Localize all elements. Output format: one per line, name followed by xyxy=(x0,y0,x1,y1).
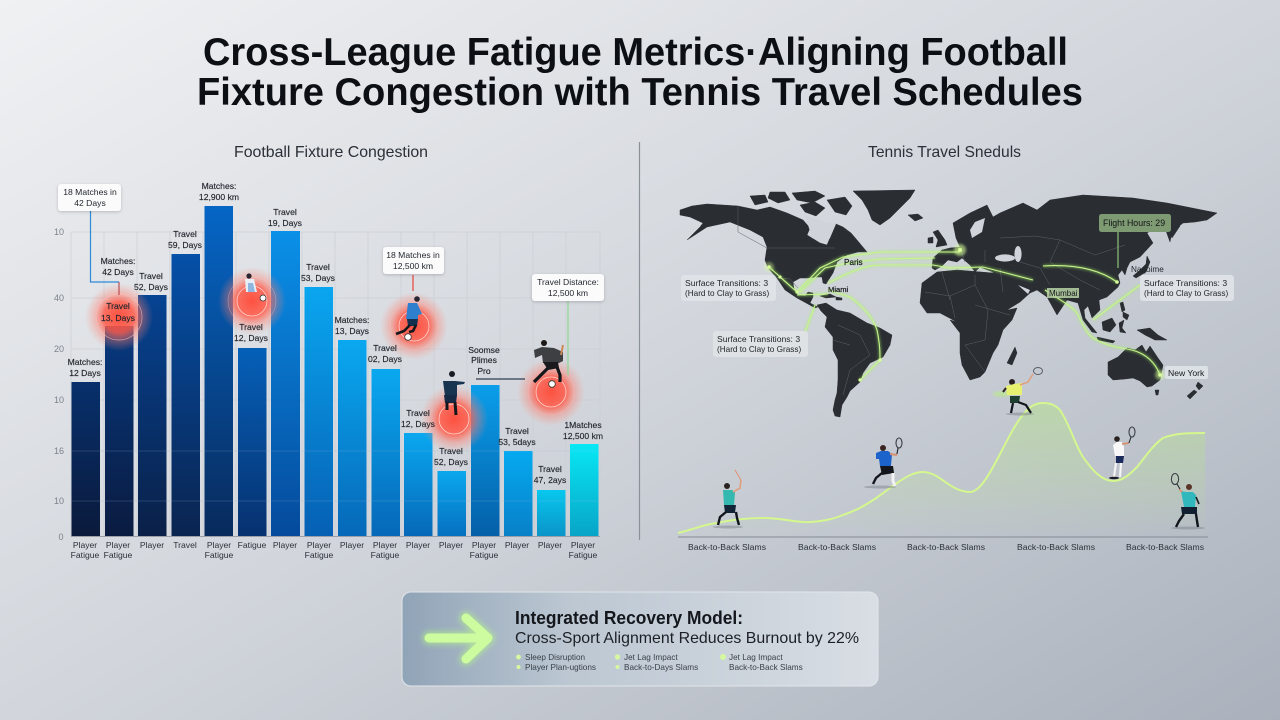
bar value labels: Travel xyxy=(505,426,529,436)
bar value labels: 53, Days xyxy=(301,273,335,283)
callout: surface transitions left xyxy=(681,275,776,301)
city label: Miami: Miami xyxy=(828,285,849,294)
y axis labels: 10 xyxy=(54,496,64,506)
flight routes xyxy=(769,231,1160,380)
bar value labels: Matches: xyxy=(202,181,236,191)
x axis labels: Player xyxy=(140,540,164,550)
callout: surface transitions left: Surface Transitions: 3 xyxy=(685,278,768,288)
bar value labels: Travel xyxy=(406,408,430,418)
callout: surface transitions right: (Hard to Clay to Grass) xyxy=(1144,289,1228,298)
chart: fatigue curve xyxy=(678,368,1208,552)
leader lines xyxy=(90,211,568,379)
title xyxy=(197,31,1083,114)
callout: surface transitions left: (Hard to Clay to Grass) xyxy=(685,289,769,298)
footballer 1 xyxy=(245,273,266,301)
bar value labels: Travel xyxy=(106,301,130,311)
callout: 18 matches in 12,500 km xyxy=(383,247,444,274)
tennis player 3 xyxy=(993,368,1042,416)
y axis labels: 40 xyxy=(54,293,64,303)
curve x labels xyxy=(688,542,1204,552)
curve x labels: Back-to-Back Slams xyxy=(1126,542,1204,552)
recovery bullets: Back-to-Days Slams xyxy=(624,663,698,672)
curve x labels: Back-to-Back Slams xyxy=(1017,542,1095,552)
city label: Mumbai: Mumbai xyxy=(1049,289,1078,298)
x axis labels: Fatigue xyxy=(569,550,598,560)
bar value labels: Travel xyxy=(373,343,397,353)
bar value labels: 42 Days xyxy=(102,267,134,277)
x axis labels: Player xyxy=(207,540,231,550)
callout: flight hours: Flight Hours: 29 xyxy=(1103,218,1165,228)
tennis player 2 xyxy=(864,438,902,488)
recovery bullets: Sleep Disruption xyxy=(525,653,586,662)
bar value labels: 53, 5days xyxy=(498,437,536,447)
x axis labels: Player xyxy=(538,540,562,550)
bar value labels: Travel xyxy=(273,207,297,217)
x axis labels: Fatigue xyxy=(104,550,133,560)
bar value labels: 1Matches xyxy=(564,420,602,430)
y axis labels: 10 xyxy=(54,395,64,405)
callout: flight hours xyxy=(1099,214,1171,232)
bar value labels xyxy=(68,181,603,485)
callout: travel distance: 12,500 km xyxy=(548,288,588,298)
y axis labels xyxy=(54,227,64,542)
x axis labels: Player xyxy=(307,540,331,550)
curve x labels: Back-to-Back Slams xyxy=(907,542,985,552)
callout: surface transitions right: Surface Transitions: 3 xyxy=(1144,278,1227,288)
bar value labels: 12, Days xyxy=(401,419,435,429)
city label: New York: New York xyxy=(1168,368,1205,378)
bar value labels: 12, Days xyxy=(234,333,268,343)
recovery bullets: Jet Lag Impact xyxy=(729,653,783,662)
map land masses xyxy=(680,190,1217,417)
footballer 3 xyxy=(443,371,465,415)
bar value labels: Soomse xyxy=(468,345,500,355)
tennis player 4 xyxy=(1109,427,1135,479)
heading: tennis panel: Tennis Travel Sneduls xyxy=(868,144,1021,161)
flight routes glow xyxy=(769,252,1160,380)
callout: travel distance: Travel Distance: xyxy=(537,277,599,287)
y axis labels: 10 xyxy=(54,227,64,237)
recovery bullets xyxy=(516,653,803,672)
title: Fixture Congestion with Tennis Travel Schedules xyxy=(197,71,1083,114)
panel: football bar chart xyxy=(54,181,604,560)
bar value labels: Matches: xyxy=(335,315,369,325)
y axis labels: 16 xyxy=(54,446,64,456)
x axis labels: Fatigue xyxy=(71,550,100,560)
bar value labels: Travel xyxy=(306,262,330,272)
bar value labels: Matches: xyxy=(68,357,102,367)
country borders xyxy=(738,206,1125,395)
city markers xyxy=(764,244,1165,382)
footballer 4 xyxy=(534,340,563,387)
bar value labels: Matches: xyxy=(101,256,135,266)
x axis labels: Travel xyxy=(173,540,197,550)
bar value labels: 12,500 km xyxy=(563,431,603,441)
panel: world map xyxy=(680,190,1234,417)
y axis labels: 0 xyxy=(58,532,64,542)
x axis labels: Player xyxy=(505,540,529,550)
bar value labels: Pro xyxy=(477,366,491,376)
y axis labels: 20 xyxy=(54,344,64,354)
curve x labels: Back-to-Back Slams xyxy=(798,542,876,552)
x axis labels: Player xyxy=(373,540,397,550)
tennis player 5 xyxy=(1171,474,1205,530)
bars xyxy=(72,206,598,536)
heading: football panel: Football Fixture Congestion xyxy=(234,144,428,161)
x axis labels: Fatigue xyxy=(305,550,334,560)
x axis labels xyxy=(71,540,598,560)
icon: glowing arrow xyxy=(429,618,488,659)
bar value labels: 52, Days xyxy=(134,282,168,292)
recovery bullets: Back-to-Back Slams xyxy=(729,663,803,672)
title: Cross-League Fatigue Metrics·Aligning Football xyxy=(203,31,1068,74)
map inland seas xyxy=(805,215,1030,294)
callout: 18 matches in 42 days: 18 Matches in xyxy=(63,187,117,197)
panel: integrated recovery model xyxy=(402,592,878,686)
bar value labels: 47, 2ays xyxy=(534,475,566,485)
x axis labels: Fatigue xyxy=(205,550,234,560)
x axis labels: Fatigue xyxy=(238,540,267,550)
bar value labels: Travel xyxy=(439,446,463,456)
callout: 18 matches in 12,500 km: 18 Matches in xyxy=(386,250,440,260)
callout: 18 matches in 42 days: 42 Days xyxy=(74,198,106,208)
x axis labels: Player xyxy=(106,540,130,550)
recovery bullets: Player Plan-ugtions xyxy=(525,663,596,672)
callout: 18 matches in 12,500 km: 12,500 km xyxy=(393,261,433,271)
bar value labels: 13, Days xyxy=(101,313,135,323)
x axis labels: Fatigue xyxy=(470,550,499,560)
city label: Paris: Paris xyxy=(844,258,863,267)
curve x labels: Back-to-Back Slams xyxy=(688,542,766,552)
city label: Tokyo: Nagoime xyxy=(1131,265,1164,274)
bar value labels: 12,900 km xyxy=(199,192,239,202)
bar value labels: 02, Days xyxy=(368,354,402,364)
footballer 2 xyxy=(396,296,422,340)
callout: travel distance xyxy=(532,274,604,301)
x axis labels: Fatigue xyxy=(371,550,400,560)
callout: surface transitions right xyxy=(1140,275,1234,301)
bar value labels: 12 Days xyxy=(69,368,101,378)
callout: surface transitions lower: (Hard to Clay to Grass) xyxy=(717,345,801,354)
bar value labels: Travel xyxy=(239,322,263,332)
callout: surface transitions lower xyxy=(713,331,808,357)
bar value labels: 19, Days xyxy=(268,218,302,228)
callout: 18 matches in 42 days xyxy=(58,184,121,211)
fatigue hot spots xyxy=(85,267,585,453)
bar value labels: Plimes xyxy=(471,355,497,365)
x axis labels: Player xyxy=(439,540,463,550)
x axis labels: Player xyxy=(571,540,595,550)
x axis labels: Player xyxy=(340,540,364,550)
bar value labels: Travel xyxy=(173,229,197,239)
tennis player 1 xyxy=(713,470,743,528)
x axis labels: Player xyxy=(472,540,496,550)
callout: surface transitions lower: Surface Transitions: 3 xyxy=(717,334,800,344)
x axis labels: Player xyxy=(406,540,430,550)
recovery bullets: Jet Lag Impact xyxy=(624,653,678,662)
recovery headline: Integrated Recovery Model: xyxy=(515,608,743,628)
x axis labels: Player xyxy=(73,540,97,550)
bar value labels: Travel xyxy=(538,464,562,474)
x axis labels: Player xyxy=(273,540,297,550)
bar value labels: 59, Days xyxy=(168,240,202,250)
bar value labels: 52, Days xyxy=(434,457,468,467)
recovery subhead: Cross-Sport Alignment Reduces Burnout by 22% xyxy=(515,630,859,647)
bar value labels: Travel xyxy=(139,271,163,281)
city label: New York xyxy=(1165,366,1208,379)
bar value labels: 13, Days xyxy=(335,326,369,336)
